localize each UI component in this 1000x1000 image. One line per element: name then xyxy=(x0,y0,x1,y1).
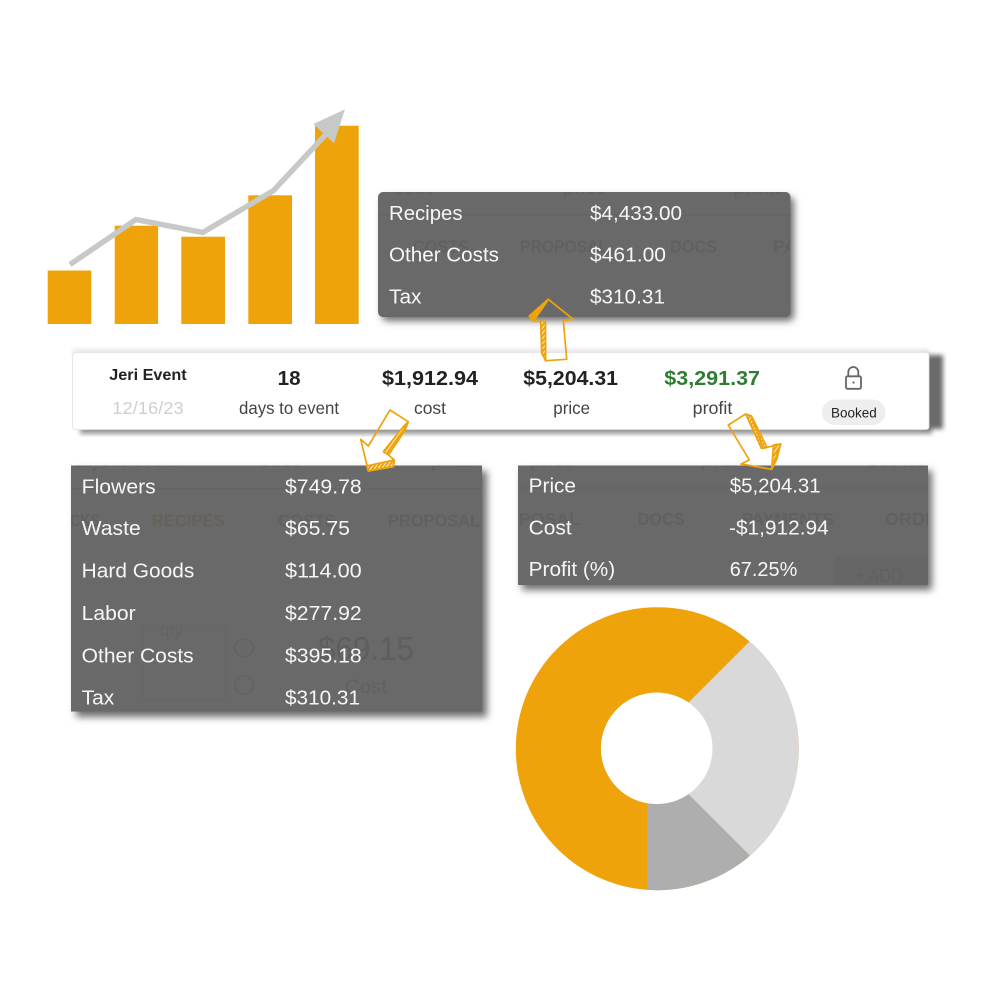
panel: profit breakdown: Profit (%) xyxy=(529,558,615,581)
panel: price breakdown: DOCS xyxy=(670,237,717,257)
price: $5,204.31 xyxy=(523,367,618,390)
panel: price breakdown: Recipes xyxy=(389,202,462,225)
segment: orange xyxy=(516,607,799,890)
arrow: profit down to profit panel xyxy=(728,414,781,469)
segment: mid gray xyxy=(647,794,750,890)
panel: price breakdown: profit xyxy=(733,178,780,198)
panel: price breakdown xyxy=(378,178,797,321)
days to event: days to event xyxy=(239,398,339,418)
event name and date: 12/16/23 xyxy=(112,398,184,418)
panel: cost breakdown: $114.00 xyxy=(285,560,362,583)
cost: cost xyxy=(414,398,446,418)
panel: cost breakdown: $277.92 xyxy=(285,602,362,625)
panel: cost breakdown: Waste xyxy=(82,517,141,540)
event name and date xyxy=(109,367,187,418)
panel: cost breakdown: Flowers xyxy=(82,475,156,498)
panel: profit breakdown: 67.25% xyxy=(730,558,797,581)
panel: price breakdown: PROPOSAL xyxy=(520,237,608,257)
panel: cost breakdown: $65.75 xyxy=(285,517,350,540)
profit: profit xyxy=(693,398,732,418)
profit xyxy=(664,367,760,418)
cost: $1,912.94 xyxy=(382,367,479,390)
panel: price breakdown: COSTS xyxy=(413,237,469,257)
panel: cost breakdown: cost xyxy=(259,451,299,471)
panel: profit breakdown: Price xyxy=(529,474,576,497)
panel: cost breakdown: $69.15 xyxy=(318,630,414,667)
price xyxy=(523,367,618,418)
trend arrow xyxy=(70,109,345,264)
bar chart with trend arrow xyxy=(48,109,359,324)
panel: profit breakdown xyxy=(505,451,937,590)
panel: cost breakdown: Cost xyxy=(345,677,388,698)
panel: cost breakdown: Tax xyxy=(82,686,115,709)
days to event: 18 xyxy=(278,367,301,390)
panel: cost breakdown: CKS xyxy=(70,511,100,531)
panel: cost breakdown: $749.78 xyxy=(285,475,362,498)
event name and date: Jeri Event xyxy=(109,367,187,384)
panel: profit breakdown: profit xyxy=(700,451,750,471)
donut chart xyxy=(516,607,799,890)
arrow: cost down to cost panel xyxy=(361,410,408,471)
panel: price breakdown: cost xyxy=(392,178,432,198)
panel: price breakdown: PA xyxy=(773,237,797,257)
panel: cost breakdown: days to event xyxy=(72,451,177,471)
cost xyxy=(382,367,479,418)
price: price xyxy=(553,398,590,418)
panel: profit breakdown: price xyxy=(530,451,575,471)
profit: $3,291.37 xyxy=(664,367,760,390)
panel: profit breakdown: ORDE xyxy=(885,509,937,529)
panel: event summary card xyxy=(72,349,943,434)
panel: profit breakdown: + ADD xyxy=(855,566,903,586)
panel: profit breakdown: Cost xyxy=(529,516,572,539)
panel: cost breakdown: $310.31 xyxy=(285,686,360,709)
donut hole xyxy=(601,692,712,804)
panel: cost breakdown: COSTS xyxy=(278,511,336,531)
panel: price breakdown: price xyxy=(563,178,606,198)
icon: lock xyxy=(846,367,861,389)
panel: profit breakdown: OPOSAL xyxy=(505,509,580,529)
panel: price breakdown: Tax xyxy=(389,285,422,308)
arrow: price up to recipes panel xyxy=(529,299,573,361)
panel: profit breakdown: DOCS xyxy=(638,509,685,529)
panel: cost breakdown: price xyxy=(431,451,475,471)
panel: cost breakdown: Hard Goods xyxy=(82,560,194,583)
panel: cost breakdown: Labor xyxy=(82,602,136,625)
days to event xyxy=(239,367,339,418)
panel: profit breakdown: PAYMENTS xyxy=(742,509,834,529)
panel: cost breakdown: RECIPES xyxy=(152,511,225,531)
panel: cost breakdown: qty xyxy=(160,621,183,640)
panel: cost breakdown: Other Costs xyxy=(82,644,194,667)
panel: price breakdown: $461.00 xyxy=(590,244,666,267)
panel: cost breakdown: PROPOSAL xyxy=(388,511,480,531)
status pill: booked: Booked xyxy=(831,404,877,420)
panel: profit breakdown: -$1,912.94 xyxy=(729,516,829,539)
status pill: booked xyxy=(822,400,886,425)
panel: price breakdown: $4,433.00 xyxy=(590,202,682,225)
bars xyxy=(48,126,359,324)
panel: price breakdown: $310.31 xyxy=(590,285,665,308)
panel: price breakdown: Other Costs xyxy=(389,244,499,267)
panel: cost breakdown: $395.18 xyxy=(285,644,362,667)
panel: cost breakdown xyxy=(70,451,487,717)
panel: profit breakdown: Booked xyxy=(868,451,926,471)
panel: profit breakdown: $5,204.31 xyxy=(730,474,821,497)
segment: light gray xyxy=(688,642,799,856)
